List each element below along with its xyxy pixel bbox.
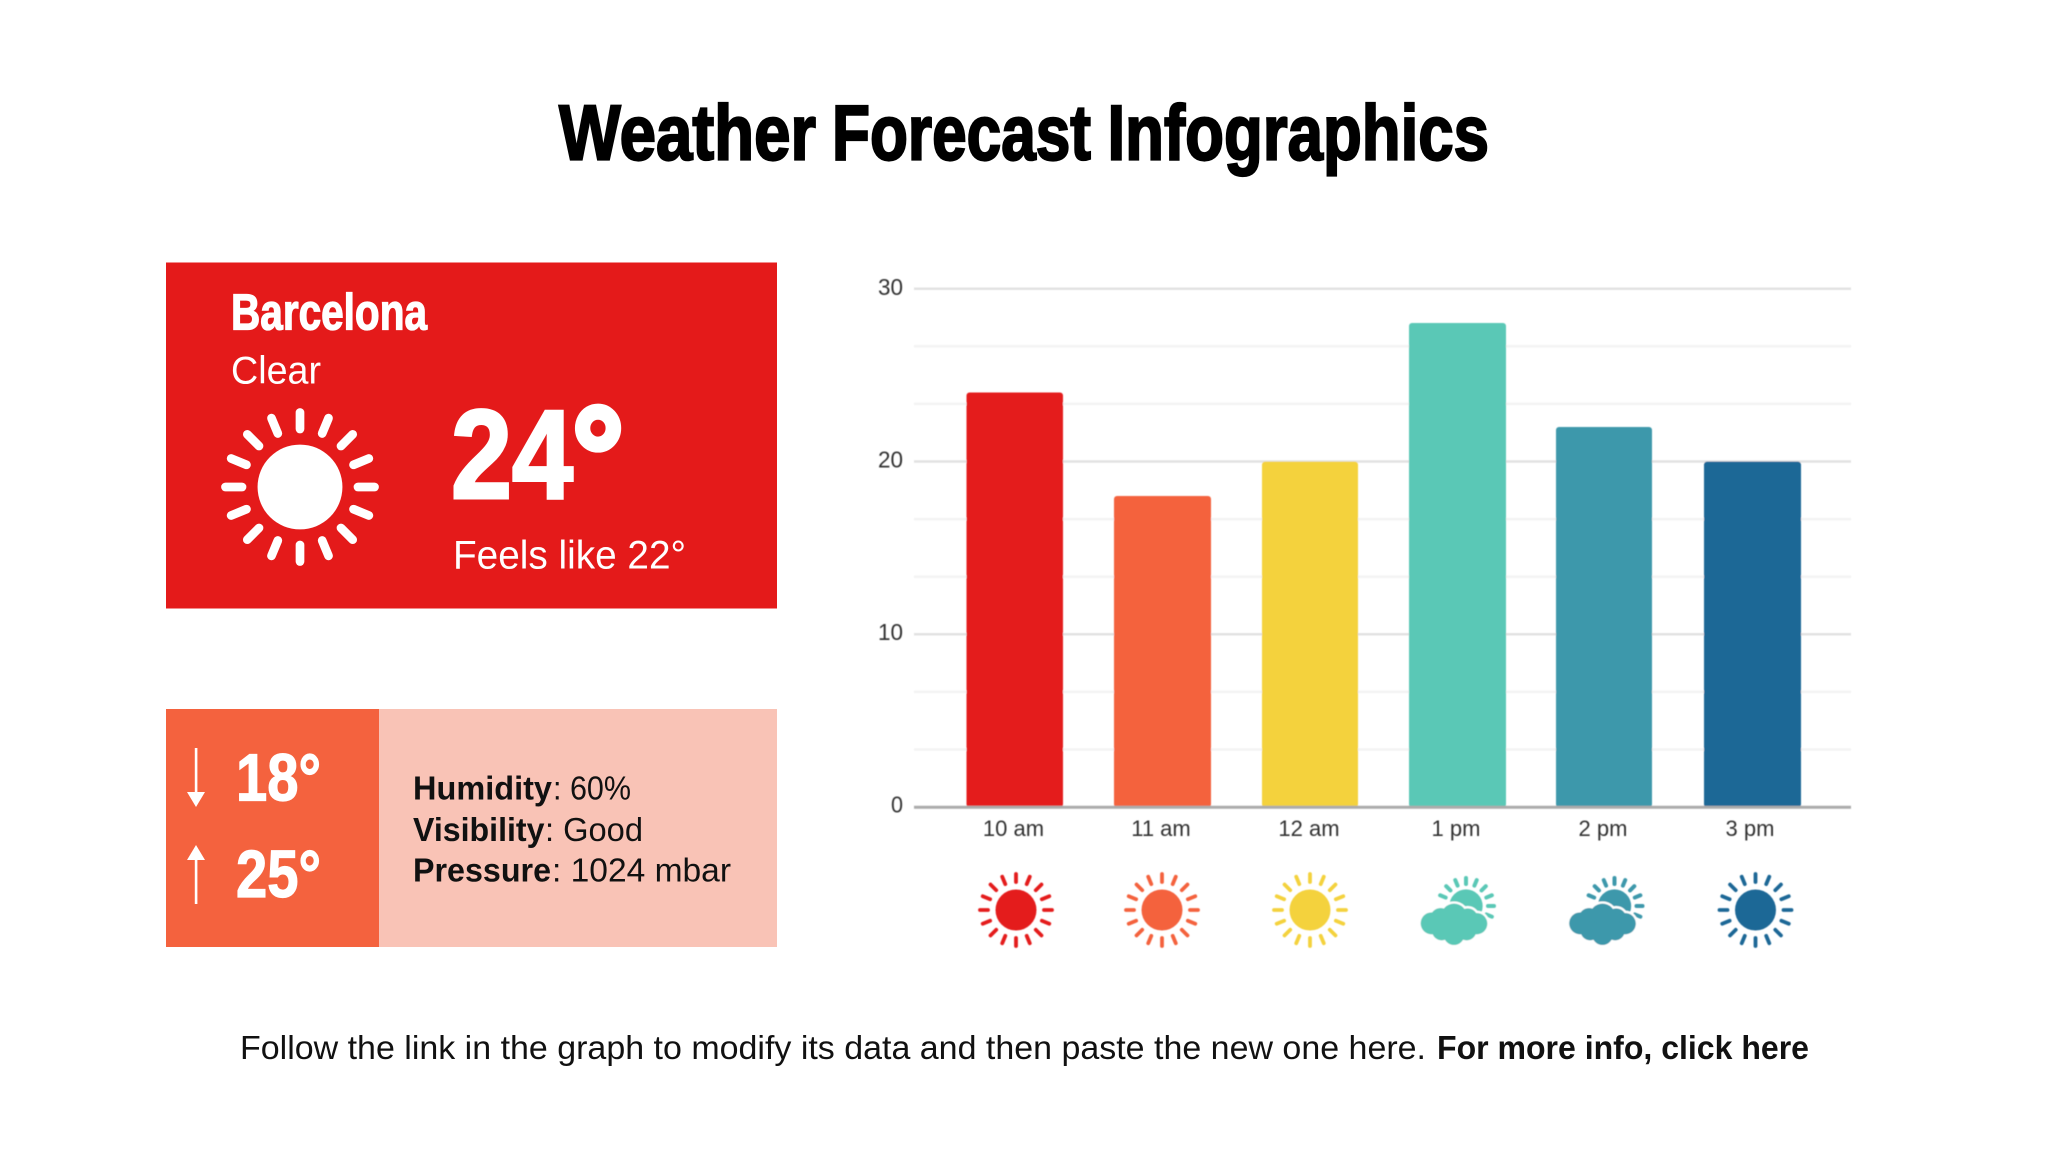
feels like: Feels like 22° [453, 534, 686, 578]
icon: cloud and sun 2 pm [1569, 878, 1642, 945]
bar: 3 pm [1704, 462, 1801, 807]
title [559, 88, 1489, 176]
visibility: : Good [545, 811, 643, 848]
y axis labels: 20 [878, 446, 903, 472]
humidity: : 60% [553, 770, 631, 806]
city name: Barcelona [231, 284, 428, 340]
icon: sun 3 pm [1720, 874, 1792, 946]
y axis labels [878, 274, 903, 818]
x axis labels: 10 am [983, 816, 1044, 841]
icon: cloud and sun 1 pm [1421, 878, 1494, 945]
title: Infographics [1108, 88, 1489, 176]
current temperature: 24 [451, 384, 573, 525]
low temperature: 18° [236, 740, 321, 816]
bar: 2 pm [1556, 427, 1652, 807]
icon: sun 10 am [980, 874, 1052, 946]
bar: 11 am [1114, 496, 1211, 807]
humidity [413, 770, 631, 806]
x axis labels: 12 am [1278, 816, 1340, 841]
condition: Clear [231, 350, 321, 393]
icon: up arrow [187, 845, 205, 904]
bar: 10 am [966, 392, 1063, 807]
humidity: Humidity [413, 770, 553, 806]
footer note: Follow the link in the graph to modify its data and then paste the new one here. [240, 1029, 1426, 1066]
icon: sun 12 am [1274, 874, 1346, 946]
bar chart [878, 274, 1851, 841]
icon: down arrow [187, 748, 205, 807]
visibility [413, 811, 643, 848]
x axis labels: 1 pm [1432, 816, 1480, 841]
icon: sun [225, 412, 375, 562]
footer note: For more info, click here [1437, 1029, 1809, 1066]
icons row [980, 874, 1792, 946]
title: Forecast [832, 88, 1091, 176]
pressure: Pressure [413, 852, 551, 888]
x axis labels: 2 pm [1579, 816, 1627, 841]
panel: conditions details [379, 709, 777, 947]
x axis labels [983, 816, 1774, 841]
x axis labels: 3 pm [1726, 816, 1774, 841]
bar: 12 am [1262, 462, 1358, 807]
icon: sun 11 am [1126, 874, 1198, 946]
high temperature: 25° [236, 837, 321, 912]
current temperature: ° [572, 377, 624, 534]
y axis labels: 10 [878, 619, 903, 645]
title: Weather [559, 88, 816, 176]
pressure [413, 852, 731, 888]
x axis labels: 11 am [1131, 816, 1191, 841]
y axis labels: 30 [878, 274, 903, 300]
panel: min and max temperature [166, 709, 379, 947]
pressure: : 1024 mbar [552, 852, 731, 888]
visibility: Visibility [413, 811, 545, 848]
panel: current weather [166, 262, 777, 608]
y axis labels: 0 [891, 792, 903, 818]
bar: 1 pm [1409, 323, 1506, 807]
